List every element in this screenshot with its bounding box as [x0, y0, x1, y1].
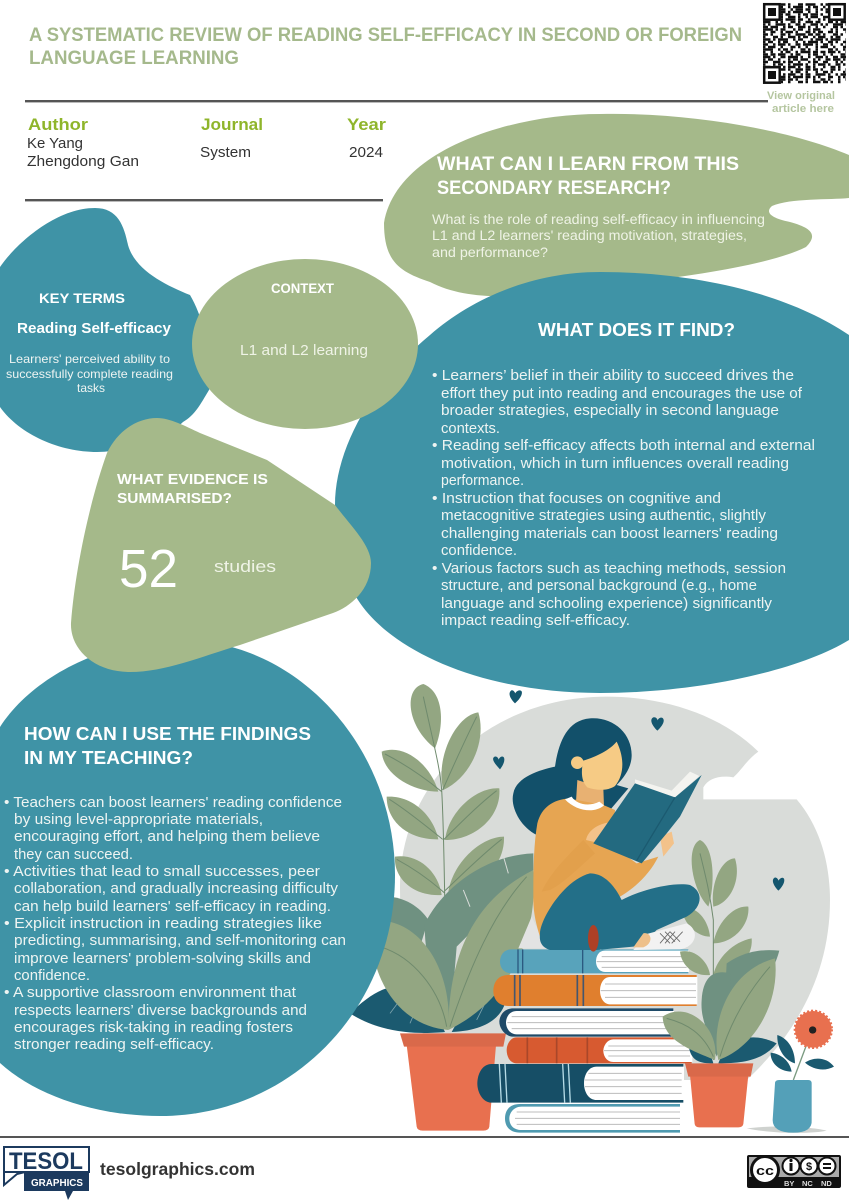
- research question: [432, 212, 765, 260]
- research question: and performance?: [432, 245, 548, 260]
- author column: [27, 115, 139, 170]
- findings list: • Various factors such as teaching methods, session: [432, 561, 786, 577]
- teaching list: they can succeed.: [14, 847, 133, 863]
- findings list: • Learners’ belief in their ability to succeed drives the: [432, 368, 794, 384]
- heart: [773, 878, 784, 891]
- stack of books: [477, 949, 697, 1133]
- neck and face: [576, 780, 604, 807]
- panel: context ellipse: [192, 259, 418, 429]
- teaching list: • Explicit instruction in reading strategies like: [4, 916, 322, 932]
- teaching list: confidence.: [14, 968, 90, 984]
- teaching list: [4, 795, 346, 1053]
- sweater: [533, 798, 658, 937]
- CC BY-NC-ND licence badge: BY: [784, 1179, 794, 1188]
- findings list: • Instruction that focuses on cognitive and: [432, 491, 721, 507]
- shoe: [633, 923, 695, 950]
- book 1: [500, 949, 688, 973]
- author column: Author: [28, 115, 88, 134]
- book cover: [593, 775, 702, 863]
- heading: SECONDARY RESEARCH?: [437, 178, 671, 199]
- journal column: Journal: [201, 115, 263, 134]
- front leaves: [448, 870, 534, 1030]
- heading: SUMMARISED?: [117, 490, 232, 507]
- heading: KEY TERMS: [39, 290, 125, 306]
- teaching list: • Teachers can boost learners' reading confidence: [4, 795, 342, 811]
- term: Reading Self-efficacy: [17, 320, 172, 337]
- illustration: girl reading on books with plants: [350, 684, 834, 1133]
- findings list: metacognitive strategies using authentic, slightly: [441, 508, 767, 524]
- teaching list: collaboration, and gradually increasing difficulty: [14, 881, 339, 897]
- number of studies: 52: [119, 539, 178, 599]
- panel: how can I use the findings blob: [0, 640, 395, 1116]
- definition: [6, 352, 173, 395]
- dark base leaves: [350, 988, 445, 1033]
- definition: Learners' perceived ability to: [9, 352, 170, 366]
- book 6: [505, 1104, 680, 1133]
- heading: [437, 154, 739, 199]
- heading: WHAT DOES IT FIND?: [538, 320, 735, 340]
- book 5: [477, 1064, 683, 1103]
- findings list: motivation, which in turn influences overall reading: [441, 456, 789, 472]
- back leaves: [387, 853, 533, 1027]
- teaching list: encourages risk-taking in reading fosters: [14, 1020, 293, 1036]
- panel: what evidence is summarised: [71, 418, 371, 672]
- teaching list: stronger reading self-efficacy.: [14, 1037, 214, 1053]
- footer rule: [0, 1136, 849, 1138]
- QR code: [763, 3, 846, 84]
- book 4: [507, 1037, 692, 1063]
- context value: L1 and L2 learning: [240, 342, 368, 359]
- author column: Ke Yang: [27, 136, 83, 152]
- findings list: • Reading self-efficacy affects both internal and external: [432, 438, 815, 454]
- heart: [510, 690, 522, 703]
- journal column: [200, 115, 263, 161]
- heading: CONTEXT: [271, 281, 335, 296]
- author column: Zhengdong Gan: [27, 154, 139, 170]
- year column: [347, 115, 386, 161]
- website: tesolgraphics.com: [100, 1159, 255, 1179]
- teaching list: • A supportive classroom environment that: [4, 985, 296, 1001]
- teaching list: predicting, summarising, and self-monitoring can: [14, 933, 346, 949]
- definition: successfully complete reading: [6, 367, 173, 381]
- studies label: studies: [214, 557, 276, 576]
- QR caption: article here: [772, 103, 834, 115]
- seat cushion: [518, 917, 627, 950]
- teaching list: improve learners' problem-solving skills and: [14, 951, 311, 967]
- CC BY-NC-ND licence badge: ND: [821, 1179, 832, 1188]
- heading: [117, 471, 268, 507]
- CC BY-NC-ND licence badge: [747, 1155, 841, 1188]
- findings list: impact reading self-efficacy.: [441, 613, 630, 629]
- definition: tasks: [77, 381, 105, 395]
- collar: [565, 797, 604, 810]
- panel: what can I learn blob: [384, 114, 849, 296]
- heading: [24, 723, 311, 768]
- heart: [651, 717, 664, 731]
- teaching list: encouraging effort, and helping them believe: [14, 829, 320, 845]
- book pages: [635, 772, 699, 797]
- findings list: confidence.: [441, 543, 517, 559]
- heading: IN MY TEACHING?: [24, 747, 193, 768]
- title: [29, 25, 742, 69]
- QR caption: [767, 90, 835, 115]
- QR caption: View original: [767, 90, 835, 102]
- upper sprig: [382, 684, 504, 895]
- findings list: performance.: [441, 473, 524, 489]
- findings list: [432, 368, 815, 629]
- findings list: structure, and personal background (e.g., home: [441, 578, 757, 594]
- title: LANGUAGE LEARNING: [29, 48, 239, 69]
- logo: TESOL Graphics: GRAPHICS: [31, 1178, 83, 1189]
- teaching list: • Activities that lead to small successes, peer: [4, 864, 320, 880]
- large potted plant: [350, 684, 534, 1131]
- title: A SYSTEMATIC REVIEW OF READING SELF-EFFICACY IN SECOND OR FOREIGN: [29, 25, 742, 46]
- pot: [407, 1045, 496, 1131]
- teaching list: respects learners’ diverse backgrounds and: [14, 1003, 307, 1019]
- illustration background shape: [400, 697, 830, 1080]
- logo: TESOL Graphics: [4, 1147, 89, 1200]
- year column: Year: [347, 115, 386, 134]
- research question: What is the role of reading self-efficacy in influencing: [432, 212, 765, 227]
- findings list: effort they put into reading and encourages the use of: [441, 386, 803, 402]
- panel: key terms blob: [0, 208, 212, 452]
- small potted plant: [663, 840, 779, 1127]
- hair: [513, 718, 632, 835]
- pants: [540, 873, 700, 950]
- citation rule: [25, 199, 383, 201]
- hands: [586, 822, 622, 843]
- header rule: [25, 100, 768, 102]
- flower in vase: [747, 1011, 834, 1133]
- teaching list: by using level-appropriate materials,: [14, 812, 263, 828]
- CC BY-NC-ND licence badge: cc: [756, 1163, 774, 1178]
- panel: what does it find blob: [335, 272, 849, 693]
- heading: HOW CAN I USE THE FINDINGS: [24, 723, 311, 744]
- findings list: language and schooling experience) significantly: [441, 596, 773, 612]
- findings list: contexts.: [441, 421, 500, 437]
- CC BY-NC-ND licence badge: $: [806, 1161, 812, 1173]
- CC BY-NC-ND licence badge: NC: [802, 1179, 813, 1188]
- findings list: challenging materials can boost learners' reading: [441, 526, 778, 542]
- research question: L1 and L2 learners' reading motivation, strategies,: [432, 228, 747, 243]
- journal column: System: [200, 145, 251, 161]
- heel: [588, 925, 599, 952]
- heart: [493, 756, 504, 769]
- girl reading: [513, 718, 702, 952]
- findings list: broader strategies, especially in second language: [441, 403, 779, 419]
- heading: WHAT EVIDENCE IS: [117, 471, 268, 488]
- logo: TESOL Graphics: TESOL: [9, 1148, 83, 1175]
- teaching list: can help build learners' self-efficacy in reading.: [14, 899, 331, 915]
- book 2: [493, 975, 697, 1006]
- year column: 2024: [349, 145, 383, 161]
- book 3: [499, 1008, 673, 1037]
- heading: WHAT CAN I LEARN FROM THIS: [437, 154, 739, 175]
